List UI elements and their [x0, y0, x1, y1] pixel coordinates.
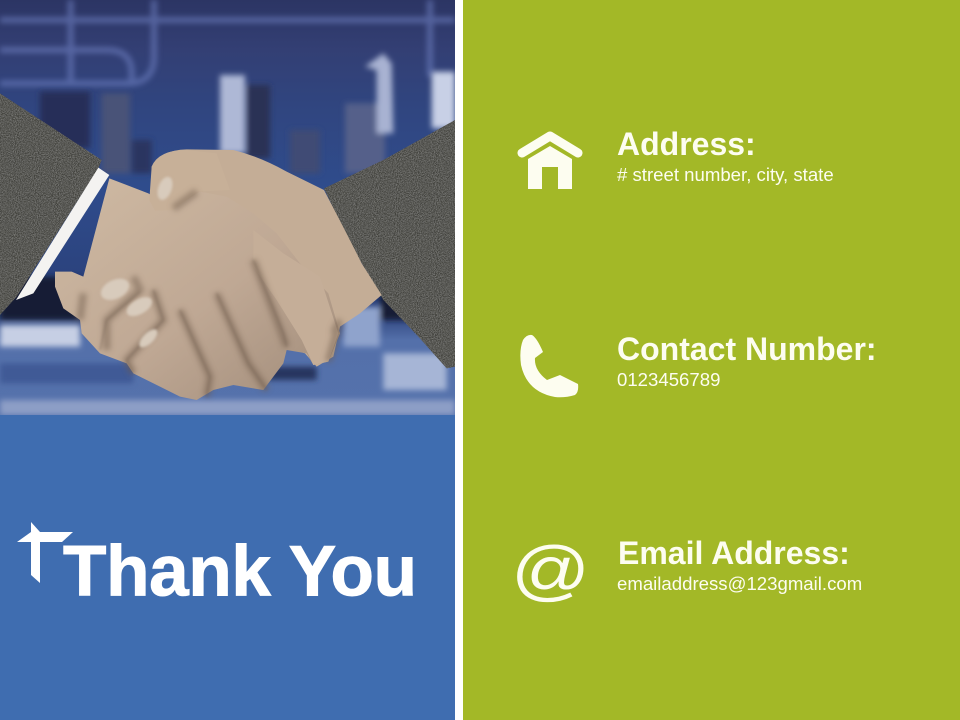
email text: emailaddress@123gmail.com [617, 573, 862, 594]
finger shadows [80, 192, 340, 397]
address text: # street number, city, state [617, 164, 834, 185]
panel: handshake photo [0, 0, 455, 415]
icon: house [518, 132, 582, 189]
email heading: Email Address: [618, 535, 850, 571]
left cuff [16, 168, 109, 300]
address heading: Address: [617, 126, 756, 162]
panel: blue title block [0, 415, 455, 720]
contact heading: Contact Number: [617, 331, 877, 367]
left hand [55, 178, 340, 400]
background city skyline [0, 53, 455, 415]
panel: green contact block [463, 0, 960, 720]
icon: phone [520, 334, 578, 398]
icon: at sign: @ [511, 532, 590, 608]
finger creases [100, 260, 287, 397]
finger nails [97, 175, 175, 350]
title: Thank You [63, 532, 417, 612]
icon: title cross mark [17, 522, 73, 583]
right sleeve [324, 120, 455, 368]
left sleeve [0, 93, 102, 315]
thumb [149, 150, 230, 211]
right hand [152, 149, 382, 367]
background grid lines [0, 0, 455, 83]
contact number: 0123456789 [617, 369, 720, 390]
right hand finger [253, 230, 338, 365]
